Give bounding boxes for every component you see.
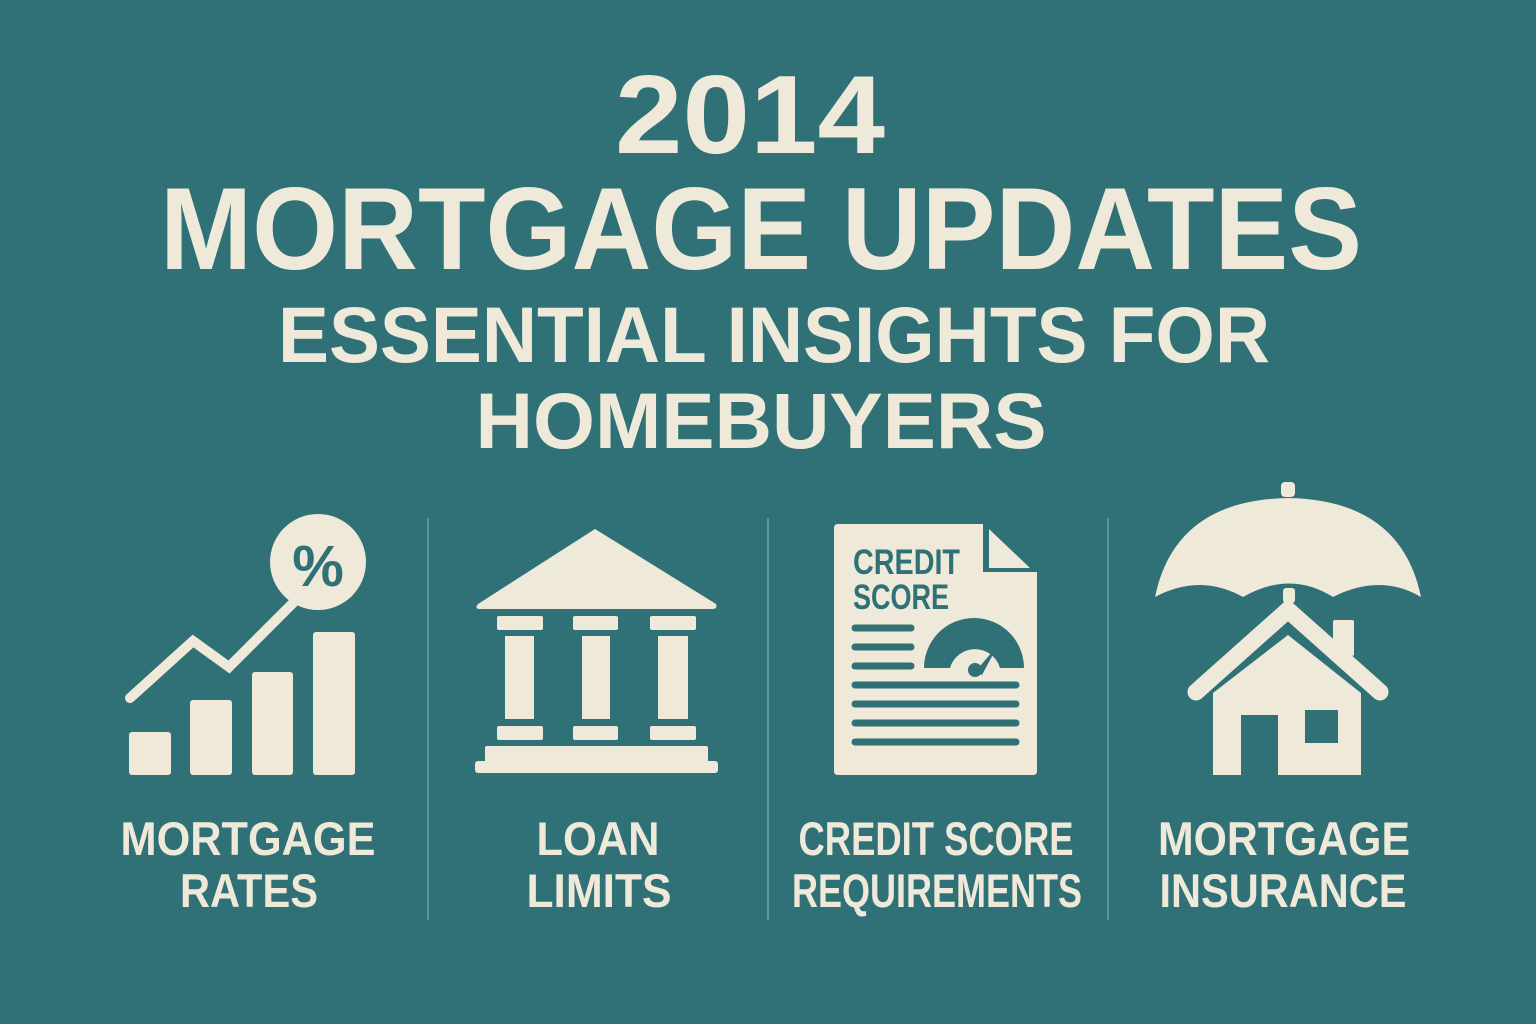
subtitle: HOMEBUYERS [476,376,1046,465]
label: loan limits [526,812,672,917]
icon: credit score document: SCORE [853,578,949,617]
label: mortgage rates [120,812,376,917]
subtitle [278,290,1270,465]
label: mortgage insurance [1158,812,1410,917]
icon: bar chart with percent: % [292,534,344,599]
title: 2014 [615,53,885,177]
icon: bank [475,529,718,773]
title: MORTGAGE UPDATES [160,163,1362,294]
panel: mortgage rates [120,514,376,917]
icon: bar chart with percent [129,514,366,775]
label: loan limits: LIMITS [526,864,672,917]
panel: mortgage insurance [1155,482,1421,917]
subtitle: ESSENTIAL INSIGHTS FOR [278,290,1270,379]
label: mortgage rates: MORTGAGE [120,812,376,865]
label: credit score requirements: CREDIT SCORE [798,812,1074,865]
label: credit score requirements: REQUIREMENTS [792,864,1082,917]
icon: umbrella over house [1155,482,1421,775]
icon: credit score document: CREDIT [853,543,960,582]
icon: credit score document [834,524,1037,775]
panel: credit score [792,524,1082,917]
label: mortgage insurance: MORTGAGE [1158,812,1410,865]
label: mortgage insurance: INSURANCE [1160,864,1406,917]
label: loan limits: LOAN [536,812,660,865]
label: credit score requirements [792,812,1082,917]
label: mortgage rates: RATES [180,864,318,917]
panel: loan limits [475,529,718,917]
title [160,53,1362,294]
